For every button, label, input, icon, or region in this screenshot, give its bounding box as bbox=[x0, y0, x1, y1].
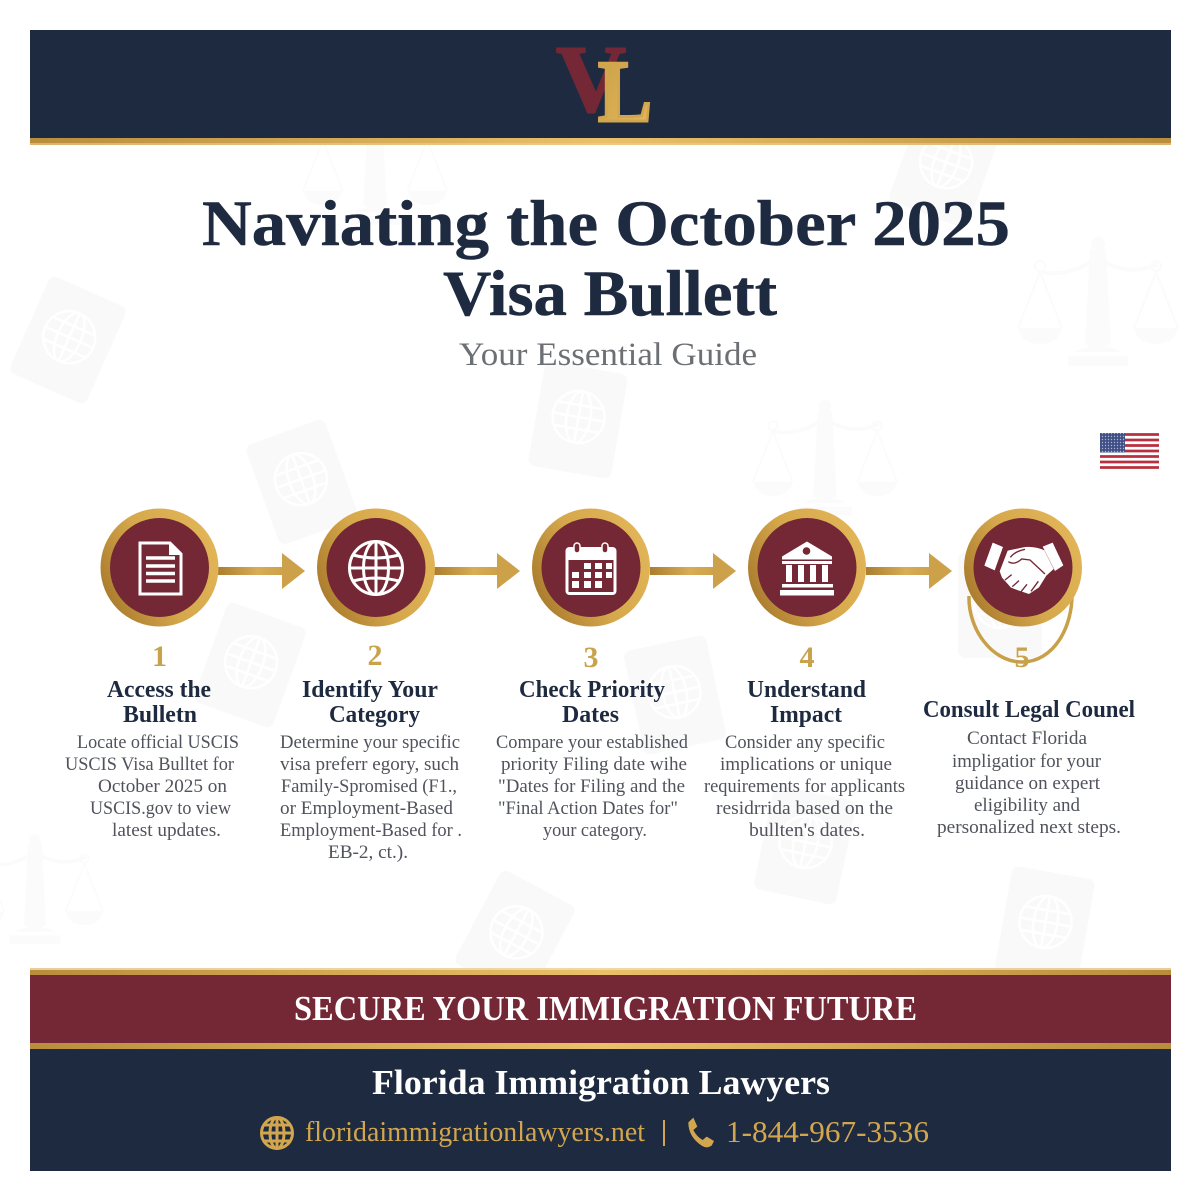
step description: guidance on expert bbox=[955, 774, 1101, 794]
arrow: step 4 to 5 bbox=[866, 553, 952, 589]
icon: globe in gold ring bbox=[317, 508, 435, 626]
step description: "Dates for Filing and the bbox=[498, 777, 685, 797]
step number: 1 bbox=[152, 640, 167, 673]
step number: 5 bbox=[1014, 641, 1030, 674]
step heading: Understand bbox=[747, 677, 867, 703]
step description: eligibility and bbox=[974, 796, 1081, 816]
step description: priority Filing date wihe bbox=[501, 755, 687, 775]
title: Naviating the October 2025 bbox=[202, 188, 1010, 260]
step heading: Impact bbox=[770, 702, 842, 728]
step description: impligatior for your bbox=[952, 752, 1101, 772]
logo: VL monogram bbox=[556, 26, 652, 141]
arrow: step 2 to 3 bbox=[434, 553, 520, 589]
step description bbox=[704, 733, 905, 841]
arrow: step 3 to 4 bbox=[650, 553, 736, 589]
icon: courthouse in gold ring bbox=[748, 508, 866, 626]
step heading bbox=[747, 677, 867, 728]
icon: US flag bbox=[1100, 433, 1159, 469]
step description: October 2025 on bbox=[98, 777, 227, 797]
step description bbox=[280, 733, 462, 863]
step description: your category. bbox=[543, 821, 647, 841]
icon: handshake in gold ring bbox=[964, 508, 1082, 626]
step description: visa preferr egory, such bbox=[280, 755, 459, 775]
call-to-action banner bbox=[30, 968, 1171, 1049]
decorative gold loop under the circle bbox=[969, 592, 1072, 662]
step description: "Final Action Dates for" bbox=[498, 799, 678, 819]
step description: Compare your established bbox=[496, 733, 689, 753]
step description: or Employment-Based bbox=[280, 799, 454, 819]
step heading bbox=[302, 677, 438, 728]
title: Visa Bullett bbox=[443, 258, 777, 330]
step heading bbox=[107, 677, 211, 728]
top header band with logo bbox=[30, 26, 1171, 145]
step heading: Dates bbox=[562, 702, 619, 728]
step description: USCIS.gov to view bbox=[90, 799, 232, 819]
step description: Family-Spromised (F1., bbox=[281, 777, 457, 797]
step 4: understand impact bbox=[704, 508, 905, 841]
step 5: consult legal counsel bbox=[923, 508, 1135, 838]
step heading: Check Priority bbox=[519, 677, 665, 703]
divider bbox=[663, 1120, 665, 1146]
step heading: Access the bbox=[107, 677, 211, 703]
step description: requirements for applicants bbox=[704, 777, 905, 797]
website: floridaimmigrationlawyers.net bbox=[305, 1117, 645, 1148]
icon: document in gold ring bbox=[100, 508, 218, 626]
step description: latest updates. bbox=[112, 821, 221, 841]
step number: 3 bbox=[584, 641, 598, 674]
step description: Determine your specific bbox=[280, 733, 460, 753]
step number: 4 bbox=[800, 641, 814, 674]
step description: Contact Florida bbox=[967, 729, 1087, 749]
subtitle: Your Essential Guide bbox=[459, 337, 757, 373]
step description: Consider any specific bbox=[725, 733, 885, 753]
phone number: 1-844-967-3536 bbox=[726, 1114, 929, 1149]
step heading bbox=[519, 677, 665, 728]
title bbox=[202, 188, 1010, 330]
step 1: access the bulletin bbox=[65, 508, 239, 841]
arrow: step 1 to 2 bbox=[218, 553, 305, 589]
step heading: Bulletn bbox=[123, 702, 197, 728]
step 3: check priority dates bbox=[496, 508, 689, 841]
step description: EB-2, ct.). bbox=[328, 843, 408, 863]
step description bbox=[65, 733, 239, 841]
background watermark pattern bbox=[0, 101, 1178, 1002]
step 2: identify your category bbox=[280, 508, 462, 863]
firm name: Florida Immigration Lawyers bbox=[372, 1063, 830, 1102]
step description: USCIS Visa Bulltet for bbox=[65, 755, 234, 775]
step description: Locate official USCIS bbox=[77, 733, 239, 753]
step heading: Consult Legal Counel bbox=[923, 697, 1135, 723]
step description: bullten's dates. bbox=[749, 821, 865, 841]
step description: residrrida based on the bbox=[716, 799, 893, 819]
step number: 2 bbox=[368, 639, 382, 672]
step heading: Identify Your bbox=[302, 677, 438, 703]
step heading: Category bbox=[329, 702, 420, 728]
icon: calendar in gold ring bbox=[532, 508, 650, 626]
icon: globe bbox=[262, 1118, 292, 1148]
step description: Employment-Based for . bbox=[280, 821, 462, 841]
step description: implications or unique bbox=[720, 755, 892, 775]
logo: VL monogram: L bbox=[598, 44, 652, 141]
step description bbox=[937, 729, 1121, 838]
step description: personalized next steps. bbox=[937, 818, 1121, 838]
logo: VL monogram: V bbox=[556, 26, 626, 132]
icon: phone bbox=[688, 1118, 714, 1147]
call-to-action banner: SECURE YOUR IMMIGRATION FUTURE bbox=[294, 989, 917, 1028]
step description bbox=[496, 733, 689, 841]
footer contact panel bbox=[30, 1049, 1171, 1171]
